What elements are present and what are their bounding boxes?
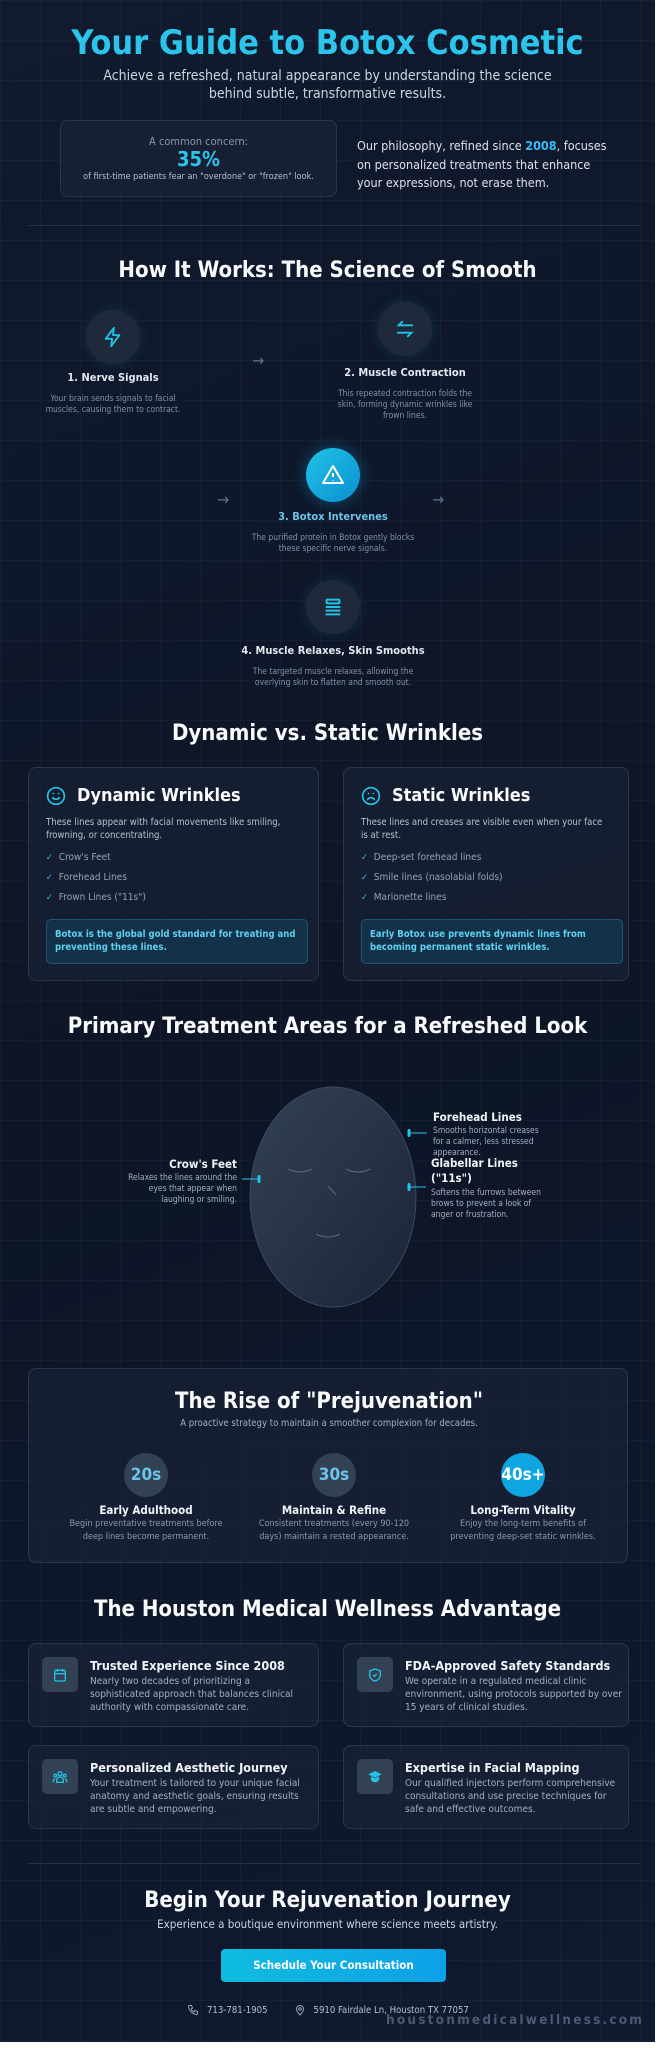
icon: graduation cap xyxy=(357,1759,393,1794)
label: forehead lines: appearance. xyxy=(433,1148,481,1158)
stage: 20s: Early Adulthood xyxy=(99,1503,193,1517)
stage: 30s: days) maintain a rested appearance. xyxy=(259,1532,409,1542)
label: forehead lines: Smooths horizontal creases xyxy=(433,1126,539,1136)
icon: frown xyxy=(362,786,380,806)
label: crow's feet: Crow's Feet xyxy=(169,1157,237,1171)
label: glabellar lines: Softens the furrows between xyxy=(431,1188,541,1198)
label: forehead lines: for a calmer, less stressed xyxy=(433,1137,534,1147)
stage: 40s+: preventing deep-set static wrinkles. xyxy=(450,1532,596,1542)
step 1 xyxy=(46,307,180,415)
card: trusted experience xyxy=(28,1643,319,1727)
card: trusted experience: Nearly two decades of prioritizing a xyxy=(90,1676,250,1687)
step 3: The purified protein in Botox gently blocks xyxy=(252,533,414,543)
arrow: → xyxy=(217,490,229,509)
card: personalized journey: Your treatment is tailored to your unique facial xyxy=(90,1778,300,1789)
panel: prejuvenation: The Rise of "Prejuvenation" xyxy=(175,1389,483,1414)
philosophy text: on personalized treatments that enhance xyxy=(357,156,590,172)
step 2: frown lines. xyxy=(383,411,427,421)
step 4: The targeted muscle relaxes, allowing the xyxy=(253,667,413,677)
step 4: overlying skin to flatten and smooth out. xyxy=(255,678,411,688)
panel: static wrinkles: ✓ Smile lines (nasolabial folds) xyxy=(361,872,503,883)
step 2: This repeated contraction folds the xyxy=(338,389,472,399)
callout xyxy=(361,919,623,964)
stat box: common concern: A common concern: xyxy=(149,135,248,148)
stage: 20s: deep lines become permanent. xyxy=(83,1532,209,1542)
icon: layers xyxy=(306,580,360,634)
step 2 xyxy=(338,299,472,421)
icon: exchange arrows xyxy=(378,302,432,356)
stat box: common concern: 35% xyxy=(177,147,220,171)
label: forehead lines xyxy=(433,1110,539,1158)
step 3: these specific nerve signals. xyxy=(279,544,387,554)
button: schedule: Schedule Your Consultation xyxy=(253,1958,414,1972)
panel: dynamic wrinkles: ✓ Crow's Feet xyxy=(46,852,111,863)
card: facial mapping: Our qualified injectors perform comprehensive xyxy=(405,1778,615,1789)
panel: dynamic wrinkles xyxy=(28,767,319,981)
arrow: → xyxy=(252,351,264,370)
label: glabellar lines: anger or frustration. xyxy=(431,1210,508,1220)
card: facial mapping: Expertise in Facial Mapping xyxy=(405,1760,580,1775)
icon: warning xyxy=(306,448,360,502)
label: crow's feet xyxy=(128,1157,237,1205)
panel: prejuvenation: A proactive strategy to maintain a smoother complexion for decades. xyxy=(180,1418,478,1429)
card: fda approved xyxy=(343,1643,629,1727)
title: Your Guide to Botox Cosmetic xyxy=(71,23,584,63)
label: glabellar lines: ("11s") xyxy=(431,1171,472,1185)
stage: 30s: Maintain & Refine xyxy=(282,1503,386,1517)
icon: location xyxy=(296,2005,304,2016)
card: fda approved: FDA-Approved Safety Standards xyxy=(405,1658,610,1673)
callout xyxy=(46,919,308,964)
step 3: 3. Botox Intervenes xyxy=(278,510,388,523)
icon: people xyxy=(42,1759,78,1794)
stat box: common concern xyxy=(60,120,337,197)
stage: 40s+: 40s+ xyxy=(501,1465,545,1485)
stage: 30s: Consistent treatments (every 90-120 xyxy=(259,1519,409,1529)
panel: static wrinkles: Static Wrinkles xyxy=(392,785,530,806)
step 1: muscles, causing them to contract. xyxy=(46,405,180,415)
contact info: 713-781-1905 xyxy=(207,2004,268,2016)
panel: dynamic wrinkles: ✓ Frown Lines ("11s") xyxy=(46,892,146,903)
card: personalized journey: are subtle and empowering. xyxy=(90,1804,217,1815)
button: schedule xyxy=(221,1949,446,1982)
panel: static wrinkles: is at rest. xyxy=(361,830,401,841)
panel: static wrinkles xyxy=(343,767,629,981)
card: trusted experience: sophisticated approach that balances clinical xyxy=(90,1689,293,1700)
panel: prejuvenation xyxy=(28,1368,628,1563)
callout: Early Botox use prevents dynamic lines from becoming permanent static wrinkles. xyxy=(370,929,586,953)
step 4 xyxy=(241,576,425,688)
heading: dynamic vs static: Dynamic vs. Static Wrinkles xyxy=(172,721,483,746)
panel: static wrinkles: ✓ Deep-set forehead lines xyxy=(361,852,481,863)
icon: phone xyxy=(188,2005,198,2015)
heading: begin journey: Begin Your Rejuvenation Journey xyxy=(144,1888,511,1913)
card: fda approved: We operate in a regulated medical clinic xyxy=(405,1676,587,1687)
card: trusted experience: authority with compassionate care. xyxy=(90,1702,249,1713)
icon: lightning xyxy=(86,310,140,364)
step 2: skin, forming dynamic wrinkles like xyxy=(338,400,472,410)
arrow: → xyxy=(432,490,444,509)
contact info xyxy=(188,2004,469,2016)
stage: 30s: 30s xyxy=(319,1465,349,1485)
website watermark: houstonmedicalwellness.com xyxy=(386,2012,644,2028)
philosophy text: Our philosophy, refined since 2008, focuses xyxy=(357,138,607,153)
card: fda approved: environment, using protocols supported by over xyxy=(405,1689,622,1700)
card: personalized journey: anatomy and aesthetic goals, ensuring results xyxy=(90,1791,299,1802)
stage: 20s: Begin preventative treatments before xyxy=(69,1519,223,1529)
icon: calendar xyxy=(42,1657,78,1692)
step 1: 1. Nerve Signals xyxy=(67,371,159,384)
panel: static wrinkles: ✓ Marionette lines xyxy=(361,892,446,903)
stat box: common concern: of first-time patients fear an "overdone" or "frozen" look. xyxy=(83,172,314,182)
step 2: 2. Muscle Contraction xyxy=(344,366,466,379)
philosophy text xyxy=(357,138,607,190)
step 3 xyxy=(252,440,414,554)
card: fda approved: 15 years of clinical studies. xyxy=(405,1702,528,1713)
stage: 30s xyxy=(259,1453,409,1542)
card: personalized journey: Personalized Aesthetic Journey xyxy=(90,1760,288,1775)
label: glabellar lines: Glabellar Lines xyxy=(431,1156,518,1170)
icon: smile xyxy=(46,786,66,806)
icon: shield xyxy=(357,1657,393,1692)
label: crow's feet: Relaxes the lines around the xyxy=(128,1173,237,1183)
label: forehead lines: Forehead Lines xyxy=(433,1110,522,1124)
card: facial mapping: consultations and use precise techniques for xyxy=(405,1791,606,1802)
heading: how it works: How It Works: The Science of Smooth xyxy=(118,258,537,283)
card: facial mapping: safe and effective outcomes. xyxy=(405,1804,536,1815)
stage: 40s+ xyxy=(450,1453,596,1542)
card: trusted experience: Trusted Experience Since 2008 xyxy=(90,1658,285,1673)
panel: dynamic wrinkles: Dynamic Wrinkles xyxy=(77,785,241,806)
heading: treatment areas: Primary Treatment Areas for a Refreshed Look xyxy=(68,1014,587,1039)
callout: Botox is the global gold standard for treating and preventing these lines. xyxy=(55,929,296,953)
face diagram xyxy=(242,1086,427,1308)
stage: 20s: 20s xyxy=(131,1465,161,1485)
stage: 20s xyxy=(69,1453,223,1542)
subtitle: Achieve a refreshed, natural appearance by understanding the science xyxy=(103,68,552,84)
card: personalized journey xyxy=(28,1745,319,1829)
philosophy text: your expressions, not erase them. xyxy=(357,175,549,190)
stage: 40s+: Long-Term Vitality xyxy=(470,1503,576,1517)
panel: dynamic wrinkles: ✓ Forehead Lines xyxy=(46,872,127,883)
panel: dynamic wrinkles: These lines appear with facial movements like smiling, xyxy=(46,817,280,828)
panel: static wrinkles: These lines and creases are visible even when your face xyxy=(361,817,602,828)
panel: dynamic wrinkles: frowning, or concentrating. xyxy=(46,830,162,841)
subtitle: behind subtle, transformative results. xyxy=(209,86,446,102)
subtitle xyxy=(103,68,552,102)
label: crow's feet: laughing or smiling. xyxy=(161,1195,237,1205)
step 4: 4. Muscle Relaxes, Skin Smooths xyxy=(241,644,425,657)
card: facial mapping xyxy=(343,1745,629,1829)
stage: 40s+: Enjoy the long-term benefits of xyxy=(460,1519,586,1529)
step 1: Your brain sends signals to facial xyxy=(50,394,176,404)
subtext: Experience a boutique environment where science meets artistry. xyxy=(157,1917,498,1931)
contact info: 5910 Fairdale Ln, Houston TX 77057 xyxy=(314,2004,469,2016)
label: glabellar lines: brows to prevent a look of xyxy=(431,1199,531,1209)
heading: advantage: The Houston Medical Wellness Advantage xyxy=(94,1597,561,1622)
label: glabellar lines xyxy=(431,1156,541,1220)
label: crow's feet: eyes that appear when xyxy=(149,1184,237,1194)
